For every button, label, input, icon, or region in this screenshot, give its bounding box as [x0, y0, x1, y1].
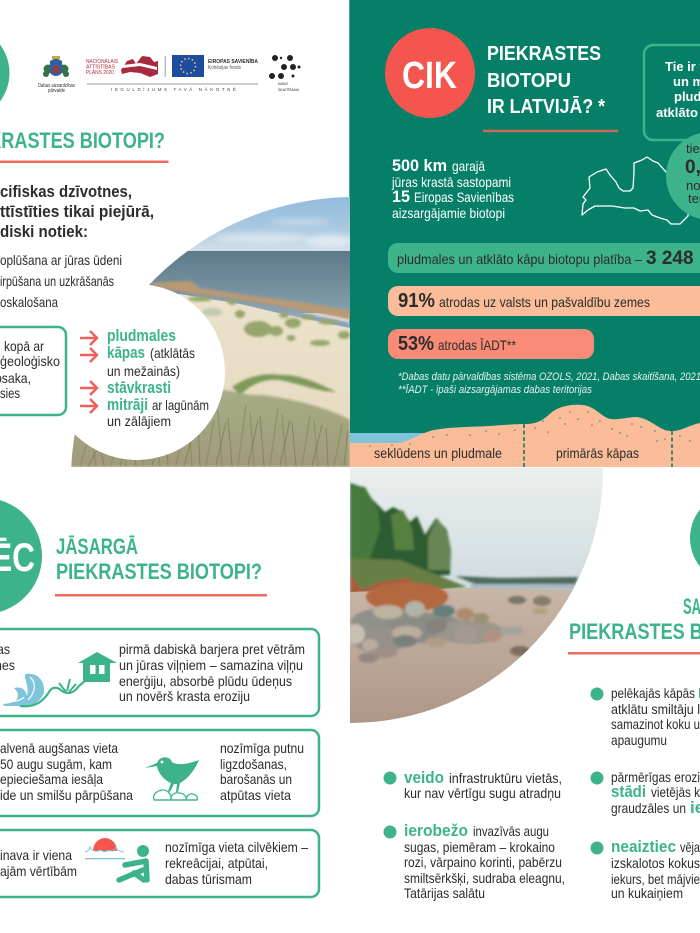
intro text: diski notiek:: [0, 223, 88, 241]
box: plants and birds: nozīmīga putnu: [220, 740, 304, 756]
box: barrier: [0, 629, 319, 716]
item: ierobežo: smiltsērkšķi, sudraba eleagnu,: [404, 870, 565, 886]
item: veido: [384, 768, 562, 801]
biotope types list: mitrāji: [107, 395, 148, 414]
icon: circle: [690, 492, 700, 584]
bar: 53%: atrodas ĪADT**: [438, 337, 516, 353]
heading: BIOTOPU: [487, 70, 571, 92]
item: grey dunes: apaugumu: [611, 732, 667, 748]
icon: teal circle: [0, 26, 10, 120]
list of processes: oplūšana ar jūras ūdeni: [0, 252, 122, 268]
box: landscape and recreation: rekreācijai, atpūtai,: [165, 855, 268, 871]
item: stādi: stādi: [611, 782, 646, 801]
icon: person watching sunset: [85, 838, 149, 880]
item: neaiztiec: [590, 837, 700, 901]
photo: rocky beach: [345, 466, 610, 730]
panel: how to preserve: [384, 492, 700, 901]
heading: [487, 43, 605, 118]
box: landscape and recreation: nozīmīga vieta cilvēkiem –: [165, 839, 308, 855]
box: plants and birds: 50 augu sugām, kam: [0, 756, 112, 772]
footnotes: **ĪADT - īpaši aizsargājamas dabas teritorijas: [398, 384, 592, 396]
stats text: Eiropas Savienības: [414, 189, 514, 205]
logos row: ATTĪSTĪBAS: [86, 64, 116, 70]
item: ierobežo: rozi, vārpaino korinti, pabērzu: [404, 854, 562, 870]
logos row: NACIONĀLAIS: [86, 58, 119, 65]
logos row: Kohēzijas fonds: [208, 65, 241, 71]
box: plants and birds: alvenā augšanas vieta: [0, 740, 118, 756]
icon: CIK circle: CIK: [402, 55, 457, 97]
biotope types list: stāvkrasti: [107, 378, 171, 397]
box: plants and birds: ide un smilšu pārpūšana: [0, 787, 133, 803]
bar: 53%: 53%: [398, 333, 434, 355]
item: ierobežo: sugas, piemēram – krokaino: [404, 839, 555, 855]
panel: what are coastal biotopes: [0, 0, 354, 467]
biotope types list: (atklātās: [150, 345, 195, 361]
item: veido: veido: [404, 768, 444, 787]
bar: 91%: [388, 286, 700, 316]
stats text: aizsargājamie biotopi: [392, 205, 505, 221]
icon: CIK circle: [385, 28, 475, 118]
bar: area total: pludmales un atklāto kāpu biotopu platība –: [397, 251, 642, 267]
box: plants and birds: ligzdošanas,: [220, 756, 287, 772]
list of processes: irpūšana un uzkrāšanās: [0, 273, 114, 289]
stats text: 500 km: [392, 156, 447, 175]
box: landscape and recreation: [0, 830, 319, 897]
icon: wave and house: [3, 652, 117, 706]
intro text: cifiskas dzīvotnes,: [0, 183, 132, 201]
logos row: EIROPAS SAVIENĪBA: [208, 58, 258, 65]
biotope types list: un zālājiem: [107, 413, 171, 429]
item: neaiztiec: un kukaiņiem: [611, 885, 683, 901]
logos row: [38, 55, 300, 94]
stats text: garajā: [452, 158, 485, 174]
stats text: jūras krastā sastopami: [391, 174, 511, 190]
logos row: Dabas aizsardzības: [38, 83, 75, 89]
diagram: dune profile: primārās kāpas: [556, 445, 639, 461]
map: Latvia outline: [582, 157, 690, 224]
item: ierobežo: [384, 821, 565, 901]
item: ierobežo: invazīvās augu: [473, 823, 549, 839]
intro text: [0, 183, 154, 241]
white circle: [49, 284, 225, 460]
box: landscape and recreation: inava ir viena: [0, 847, 72, 863]
box: barrier: pirmā dabiskā barjera pret vētrām: [119, 641, 305, 657]
diagram: dune profile: seklūdens un pludmale: [374, 445, 502, 461]
heading: PIEKRASTES BIOTOPI?: [56, 559, 262, 584]
list of processes: [0, 252, 122, 310]
box: plants and birds: epieciešama iesāļa: [0, 771, 103, 787]
heading: IR LATVIJĀ? *: [487, 96, 605, 118]
panel: how many biotopes in Latvia: [350, 0, 700, 467]
box: landscape and recreation: dabas tūrismam: [165, 871, 252, 887]
list of processes: oskalošana: [0, 294, 58, 310]
logos row: pārvalde: [48, 88, 65, 94]
item: veido: infrastruktūru vietās,: [449, 770, 562, 786]
item: neaiztiec: neaiztiec: [611, 837, 676, 856]
heading: PIEKRASTES: [487, 43, 601, 65]
biotope types list: [107, 326, 209, 429]
icon: circle with text: [0, 498, 42, 614]
heading: [56, 534, 262, 584]
logos row: SKAITĪŠANA: [278, 87, 299, 92]
heading: JĀSARGĀ: [56, 534, 138, 559]
intro text: ttīstīties tikai piejūrā,: [0, 203, 154, 221]
bar: 91%: atrodas uz valsts un pašvaldību zemes: [439, 294, 650, 310]
item: ierobežo: ierobežo: [404, 821, 468, 840]
box: plants and birds: barošanās un: [220, 771, 292, 787]
biotope types list: un mežainās): [107, 363, 180, 379]
box: description: sies: [0, 385, 20, 401]
box: plants and birds: atpūtas vieta: [220, 787, 291, 803]
biotope types list: ar lagūnām: [152, 397, 209, 413]
box: description: [0, 327, 66, 415]
circle: share of territory: tie: [686, 141, 700, 156]
arrows: [80, 331, 97, 413]
stats text: 15: [392, 187, 410, 206]
box: barrier: un novērš krasta eroziju: [119, 688, 250, 704]
heading: [569, 594, 700, 644]
box: description: ģeoloģisko: [0, 353, 60, 369]
item: stādi: graudzāles un: [611, 800, 686, 816]
panel: why protect: [0, 467, 350, 933]
circle: share of territory: [666, 132, 700, 220]
biotope types list: pludmales: [107, 326, 176, 345]
logos row: IEGULDĪJUMS TAVĀ NĀKOTNĒ: [111, 86, 236, 92]
photo: dunes and sea: [60, 190, 354, 467]
bar: 53%: [388, 329, 594, 359]
footnotes: [398, 371, 700, 396]
bar: area total: [388, 243, 700, 273]
item: ierobežo: Tatārijas salātu: [404, 885, 485, 901]
box: plants and birds: [0, 730, 319, 816]
diagram: dune profile: [350, 405, 700, 467]
bar: 91%: 91%: [398, 290, 435, 312]
box: landscape and recreation: ajām vērtībām: [0, 863, 77, 879]
box: description: kopā ar: [4, 338, 44, 354]
biotope types list: kāpas: [107, 343, 145, 362]
box: barrier: enerģiju, absorbē plūdu ūdeņus: [119, 673, 292, 689]
logos row: DABAS: [278, 81, 288, 86]
item: stādi: [590, 769, 700, 817]
stats text: [391, 156, 514, 221]
logos row: PLĀNS 2020: [86, 69, 114, 76]
item: grey dunes: [590, 685, 700, 748]
box: barrier: un jūras viļņiem – samazina viļņu: [119, 657, 303, 673]
icon: bird on stones: [145, 757, 199, 800]
item: veido: kur nav vērtīgu sugu atradņu: [404, 785, 561, 801]
callout: box: [644, 45, 700, 140]
